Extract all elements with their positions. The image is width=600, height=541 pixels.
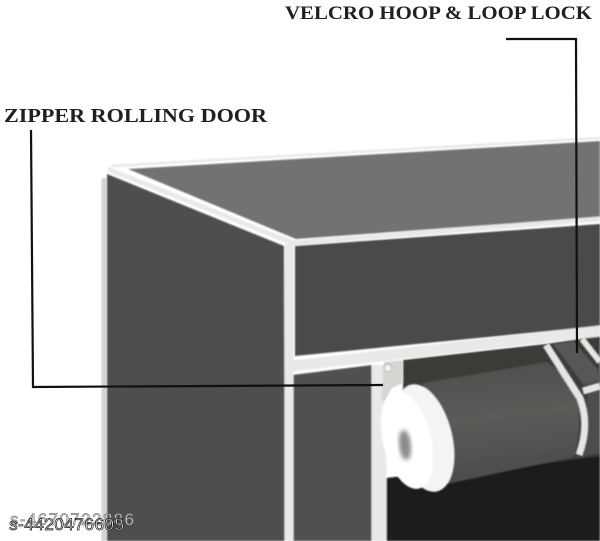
strap flap	[553, 341, 600, 385]
roller	[372, 339, 600, 498]
roll end cap back	[384, 378, 464, 498]
front left strip	[292, 365, 372, 541]
callout line: velcro hoop and loop lock	[506, 39, 577, 353]
watermark: s-4670722886	[10, 510, 134, 529]
dark opening	[386, 453, 600, 541]
cap centre	[397, 429, 413, 461]
shadowed door above roll	[403, 336, 600, 482]
watermark: s-4420476605	[9, 515, 124, 534]
zipper pull	[381, 360, 403, 402]
roll end cap front	[372, 386, 442, 494]
left side panel	[107, 174, 285, 541]
callout line: zipper rolling door	[31, 130, 383, 387]
top panel	[128, 141, 600, 239]
white piping	[104, 138, 600, 541]
velcro strap	[546, 339, 600, 455]
heading: velcro hoop and loop lock: VELCRO HOOP & LOOP LOCK	[285, 4, 593, 24]
front header panel	[295, 224, 600, 356]
wardrobe	[104, 138, 600, 541]
heading: zipper rolling door: ZIPPER ROLLING DOOR	[4, 105, 268, 127]
door fabric right of strap	[582, 386, 600, 456]
rolled fabric	[423, 362, 579, 484]
